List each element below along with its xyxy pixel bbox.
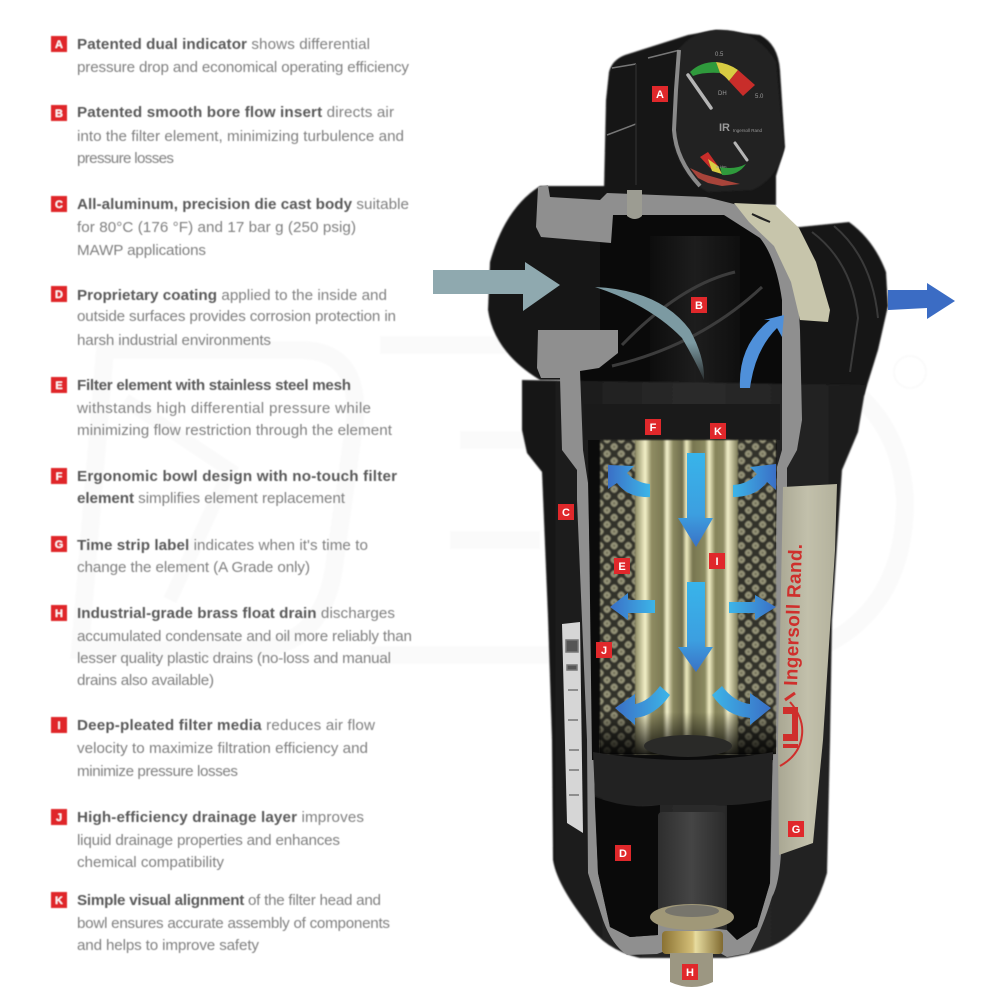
flow arrow down lower: [678, 582, 713, 672]
marker K: K: [714, 426, 722, 438]
feature H: Industrial-grade brass float drain discharges: [77, 605, 395, 622]
drain stub: [670, 953, 713, 987]
feature I: [51, 717, 375, 780]
upper gauge needle: [688, 75, 711, 108]
flow insert ring: [612, 272, 762, 366]
feature H: lesser quality plastic drains (no-loss and manual: [77, 650, 391, 667]
feature K: K: [55, 895, 63, 907]
outlet port: [790, 222, 888, 395]
feature E: Filter element with stainless steel mesh: [77, 377, 351, 394]
flow arrow right: [729, 595, 776, 620]
feature C: MAWP applications: [77, 242, 206, 259]
feature G: G: [55, 539, 63, 551]
marker E: E: [618, 561, 626, 573]
gauge labels: DH: [718, 91, 727, 97]
gauge logo: IR: [719, 122, 730, 134]
marker C: C: [562, 507, 570, 519]
filter mesh left: [600, 440, 636, 754]
filter mesh right: [737, 440, 776, 754]
feature J: chemical compatibility: [77, 854, 224, 871]
head gray casting: [536, 185, 802, 957]
indicator housing: [604, 30, 785, 205]
flow arrow lower right: [712, 686, 771, 725]
marker A: [652, 86, 668, 102]
feature A: A: [55, 39, 63, 51]
feature F: element simplifies element replacement: [77, 490, 346, 507]
feature E: E: [55, 380, 63, 392]
feature C: [51, 196, 409, 259]
feature B: [51, 104, 404, 167]
feature I: Deep-pleated filter media reduces air flow: [77, 717, 375, 734]
feature B: B: [55, 108, 63, 120]
gauge silver rim: [674, 50, 700, 186]
inlet arrow: [433, 262, 560, 311]
brass collar: [662, 931, 723, 954]
marker G: [788, 821, 804, 837]
outlet up arrow: [740, 315, 784, 388]
marker E: [614, 558, 630, 574]
filter lower bowl: [593, 752, 773, 806]
feature F: [51, 468, 397, 507]
gauge logo: [719, 122, 763, 134]
feature J: High-efficiency drainage layer improves: [77, 809, 364, 826]
marker C: [558, 504, 574, 520]
feature C: for 80°C (176 °F) and 17 bar g (250 psig): [77, 219, 356, 236]
feature K: [51, 892, 390, 954]
label notch: [752, 214, 770, 222]
gauge labels: 0.5: [715, 52, 724, 58]
feature I: minimize pressure losses: [77, 763, 238, 780]
gauge dial: [674, 30, 784, 192]
feature D: Proprietary coating applied to the inside and: [77, 287, 387, 304]
feature B: pressure losses: [77, 150, 174, 167]
marker G: G: [792, 824, 800, 836]
bowl outer shell: [522, 380, 866, 958]
feature K: and helps to improve safety: [77, 937, 259, 954]
feature A: [51, 36, 409, 76]
callout markers: [558, 86, 804, 980]
feature B: Patented smooth bore flow insert directs air: [77, 104, 394, 121]
flow arrow upper right: [733, 464, 776, 497]
gauge logo: Ingersoll Rand: [733, 128, 763, 133]
outlet port ribs: [812, 226, 878, 372]
bottom fade: [600, 712, 776, 754]
flow arrow left: [610, 593, 655, 620]
flow arrow upper left: [608, 465, 650, 497]
inlet port: [488, 186, 620, 380]
feature I: velocity to maximize filtration efficiency and: [77, 740, 368, 757]
feature F: Ergonomic bowl design with no-touch filter: [77, 468, 397, 485]
marker H: H: [686, 967, 694, 979]
feature A: Patented dual indicator shows differential: [77, 36, 370, 53]
feature I: I: [57, 720, 61, 732]
feature D: [51, 286, 396, 349]
marker F: F: [650, 422, 657, 434]
watermark logo: [80, 345, 926, 655]
outlet arrow: [888, 283, 955, 319]
flow arrow down upper: [678, 453, 713, 547]
feature B: into the filter element, minimizing turbulence and: [77, 128, 404, 145]
feature D: D: [55, 289, 63, 301]
upper gauge arcs: [690, 62, 755, 96]
drain cylinder: [658, 812, 725, 912]
gauge labels: in.Hm: [716, 164, 727, 169]
marker J: J: [601, 645, 607, 657]
marker H: [682, 964, 698, 980]
feature J: liquid drainage properties and enhances: [77, 832, 340, 849]
head rear interior: [578, 205, 786, 405]
housing edge: [635, 64, 637, 185]
marker A: A: [656, 89, 664, 101]
drain flange top: [665, 905, 719, 917]
time strip label: [778, 484, 837, 855]
housing panel lines: [607, 50, 680, 135]
marker K: [710, 423, 726, 439]
feature C: All-aluminum, precision die cast body suitable: [77, 196, 409, 213]
gauge labels: 5.0: [755, 94, 764, 100]
feature G: Time strip label indicates when it's time to: [77, 537, 368, 554]
pleated media: [635, 440, 738, 754]
feature G: change the element (A Grade only): [77, 559, 310, 576]
marker D: D: [619, 848, 627, 860]
drain flange: [650, 904, 734, 930]
feature H: [51, 605, 412, 689]
marker D: [615, 845, 631, 861]
feature A: pressure drop and economical operating efficiency: [77, 59, 409, 76]
upper beige label: [734, 203, 830, 322]
brand name: Ingersoll Rand.: [781, 544, 807, 686]
marker F: [645, 419, 661, 435]
marker J: [596, 642, 612, 658]
lower gauge needle: [735, 143, 747, 160]
flow insert cylinder: [650, 236, 740, 404]
marker B: B: [695, 300, 703, 312]
feature H: H: [55, 608, 63, 620]
feature J: J: [56, 812, 62, 824]
marker I: [709, 553, 725, 569]
feature E: minimizing flow restriction through the element: [77, 422, 393, 439]
feature H: accumulated condensate and oil more reliably than: [77, 628, 412, 645]
feature C: C: [55, 199, 63, 211]
filter top cap: [584, 404, 780, 440]
filter end cap: [644, 735, 732, 757]
feature D: outside surfaces provides corrosion protection in: [77, 308, 396, 325]
flow arrow lower left: [615, 686, 670, 725]
deflected flow: [595, 287, 704, 380]
valve pin: [627, 190, 642, 219]
feature H: drains also available): [77, 672, 214, 689]
lower gauge arcs: [690, 152, 746, 186]
brand logo: [780, 693, 802, 766]
data label strip: [562, 622, 583, 833]
bowl interior: [595, 797, 771, 940]
feature E: [51, 377, 393, 439]
filter cutaway illustration: [433, 30, 955, 987]
feature J: [51, 809, 364, 871]
filter cavity: [588, 440, 777, 760]
feature K: bowl ensures accurate assembly of components: [77, 915, 390, 932]
gauge labels: [715, 52, 764, 169]
feature list: [51, 36, 412, 954]
feature K: Simple visual alignment of the filter head and: [77, 892, 381, 909]
feature E: withstands high differential pressure while: [76, 400, 371, 417]
feature F: F: [56, 471, 63, 483]
feature D: harsh industrial environments: [77, 332, 271, 349]
marker B: [691, 297, 707, 313]
marker I: I: [715, 556, 719, 568]
feature G: [51, 536, 368, 576]
